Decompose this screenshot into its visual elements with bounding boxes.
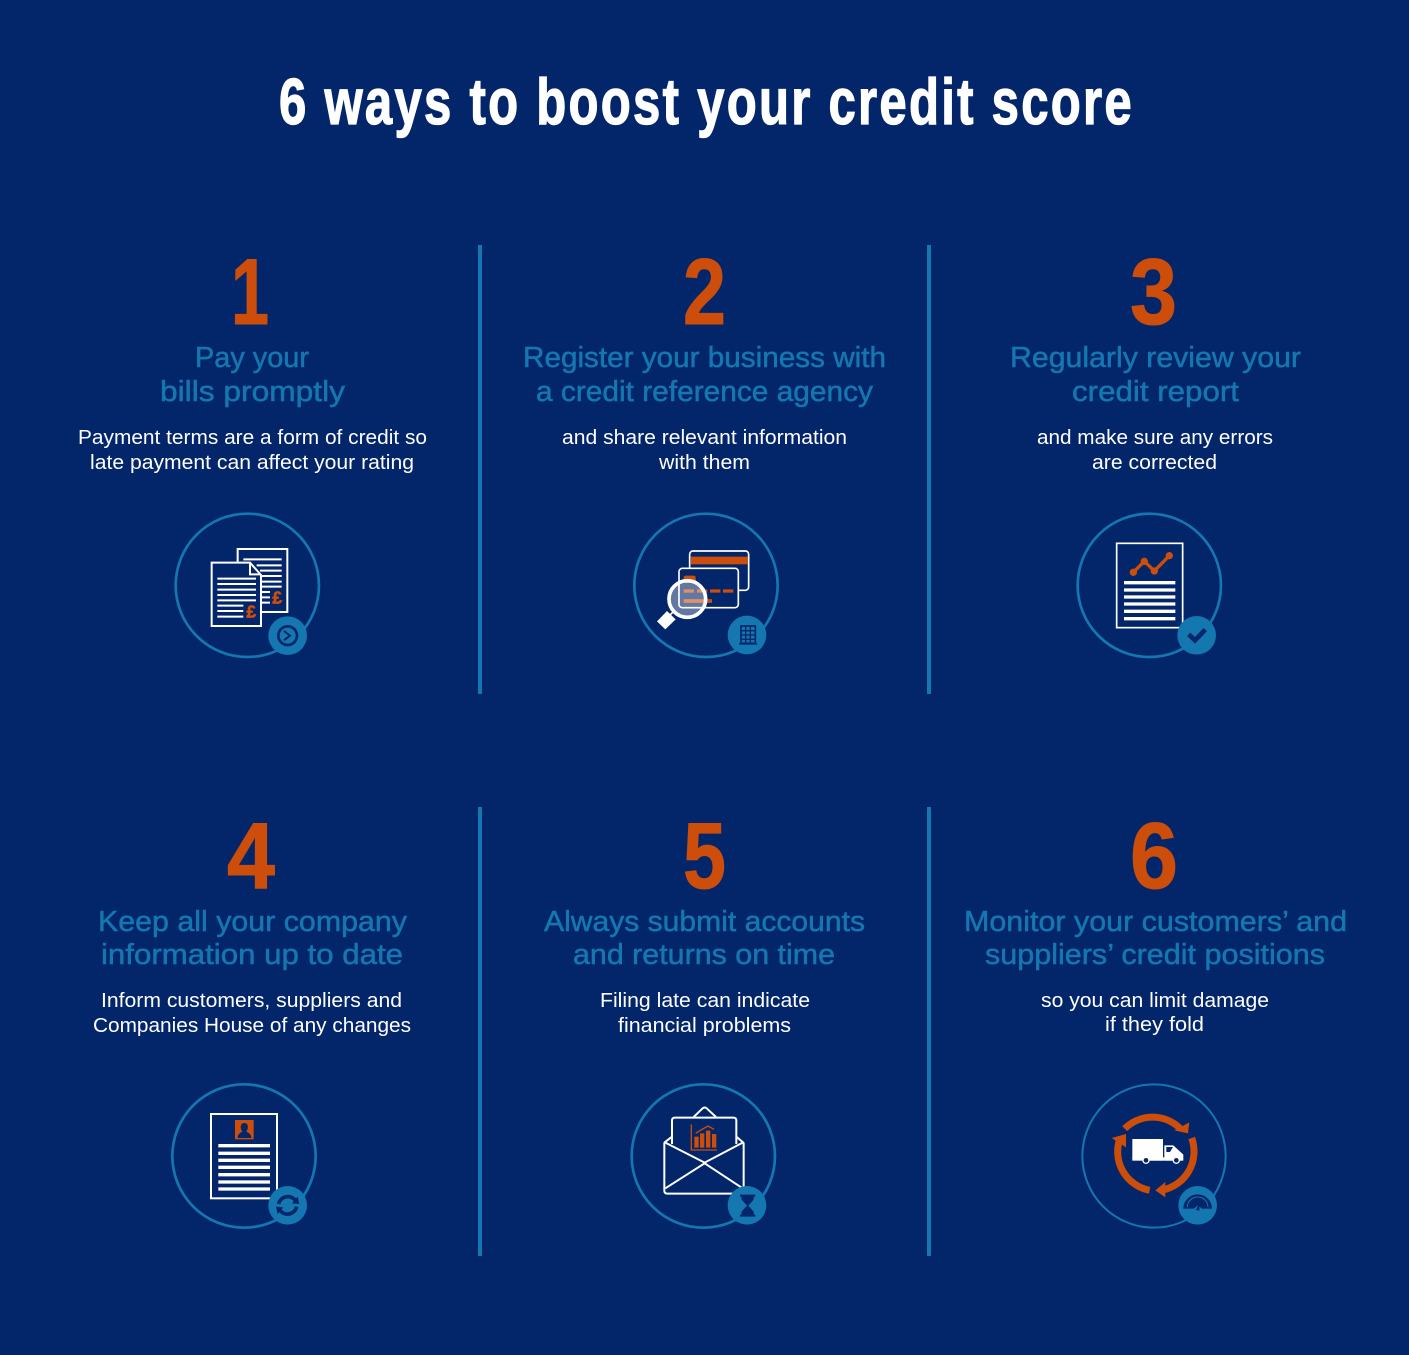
heading: step 5: and returns on time <box>573 939 835 971</box>
heading: step 2: a credit reference agency <box>536 376 874 408</box>
heading: step 1 <box>160 342 346 408</box>
text: step 4: Inform customers, suppliers and <box>101 990 402 1012</box>
text: step 4 <box>93 990 411 1037</box>
text: step 3: are corrected <box>1092 452 1217 474</box>
icon: company profile with refresh <box>172 1084 316 1228</box>
icon: envelope with hourglass <box>632 1084 775 1228</box>
heading: step 3: Regularly review your <box>1010 342 1301 374</box>
heading: step 5: Always submit accounts <box>544 906 865 938</box>
text: step 3: and make sure any errors <box>1037 427 1273 449</box>
heading: step 1: bills promptly <box>160 376 346 408</box>
icon: bills with clock <box>176 514 319 657</box>
text: step 6: so you can limit damage <box>1041 990 1269 1012</box>
heading: step 4: Keep all your company <box>98 906 408 938</box>
icon: delivery truck with gauge <box>1082 1084 1226 1228</box>
panel: step 1 <box>78 239 427 657</box>
heading: step 6: Monitor your customers’ and <box>964 906 1347 938</box>
text: step 6 <box>1041 990 1269 1036</box>
number 3: 3 <box>1130 239 1177 344</box>
title: 6 ways to boost your credit score <box>279 65 1134 138</box>
heading: step 3: credit report <box>1072 376 1239 408</box>
heading: step 6: suppliers’ credit positions <box>985 939 1325 971</box>
heading: step 4 <box>98 906 408 971</box>
text: step 6: if they fold <box>1105 1014 1204 1036</box>
heading: step 2 <box>523 342 886 408</box>
panel: step 5 <box>544 803 865 1228</box>
text: step 5: Filing late can indicate <box>600 990 810 1012</box>
panel: step 2 <box>523 239 886 657</box>
number 5: 5 <box>683 803 726 908</box>
heading: step 3 <box>1010 342 1301 408</box>
text: step 5 <box>600 990 810 1037</box>
number 2: 2 <box>683 239 726 344</box>
heading: step 4: information up to date <box>101 939 403 971</box>
text: step 2: and share relevant information <box>562 427 847 449</box>
icon: bills with clock: £ <box>246 601 256 621</box>
panel: step 4 <box>93 803 411 1228</box>
text: step 5: financial problems <box>618 1015 791 1037</box>
text: step 1: Payment terms are a form of credit so <box>78 427 427 449</box>
icon: credit cards with magnifier <box>634 514 778 657</box>
heading: step 5 <box>544 906 865 971</box>
text: step 1 <box>78 427 427 474</box>
text: step 2 <box>562 427 847 474</box>
icon: bills with clock: £ <box>272 588 282 608</box>
number 6: 6 <box>1130 803 1178 908</box>
panel: step 3 <box>1010 239 1301 657</box>
text: step 1: late payment can affect your rating <box>90 452 414 474</box>
heading: step 2: Register your business with <box>523 342 886 374</box>
heading: step 6 <box>964 906 1347 971</box>
icon: credit report with tick <box>1078 514 1221 657</box>
heading: step 1: Pay your <box>195 342 309 374</box>
text: step 3 <box>1037 427 1273 474</box>
number 1: 1 <box>231 239 269 344</box>
text: step 4: Companies House of any changes <box>93 1015 411 1037</box>
text: step 2: with them <box>658 452 750 474</box>
number 4: 4 <box>227 803 275 908</box>
panel: step 6 <box>964 803 1347 1228</box>
